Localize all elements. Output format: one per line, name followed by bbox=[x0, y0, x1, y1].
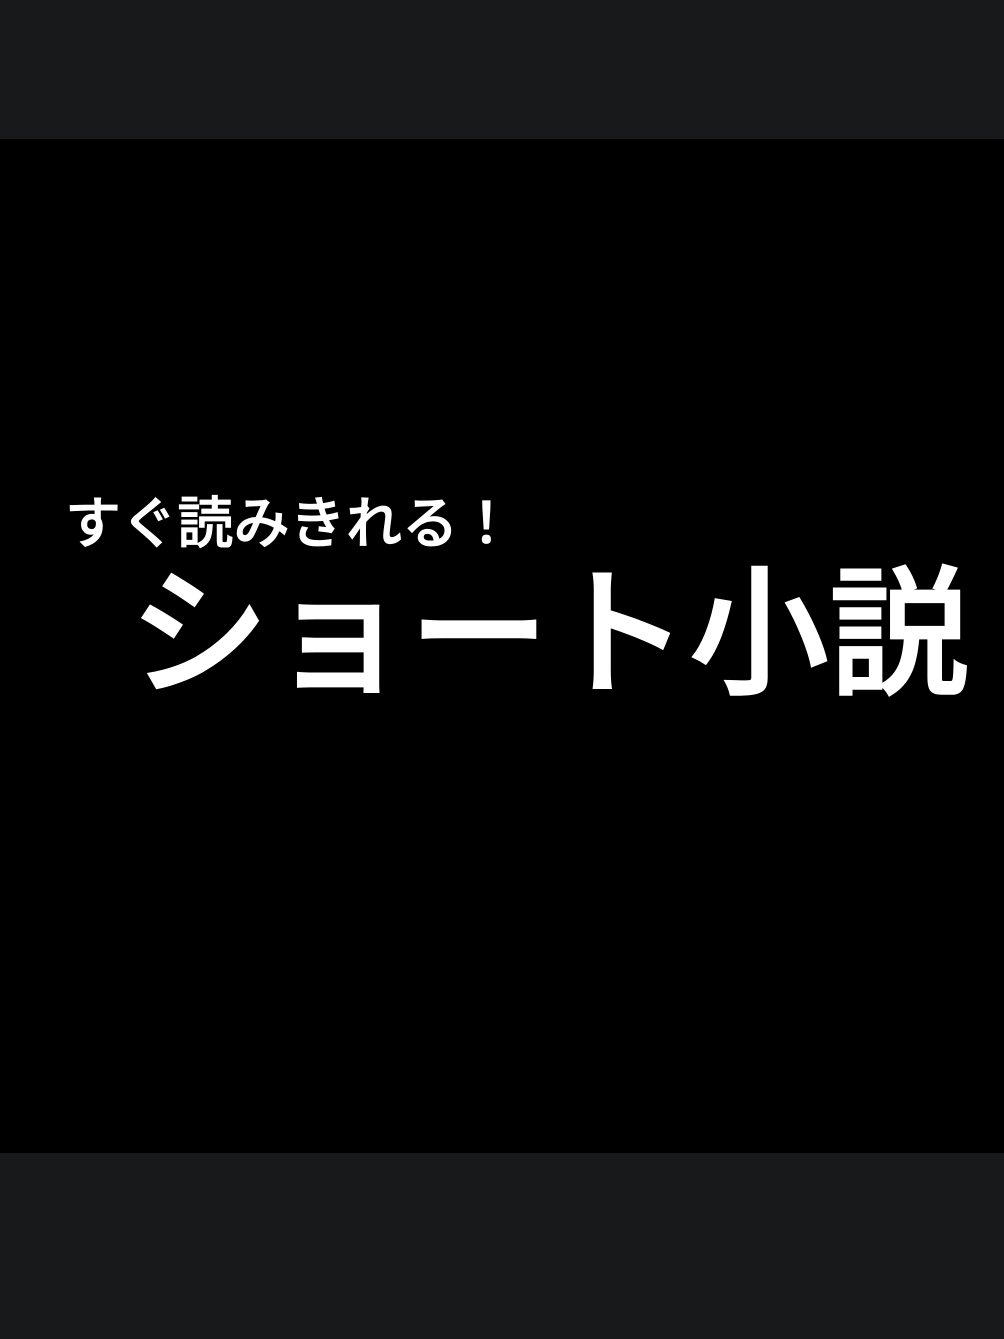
subtitle: すぐ読みきれる！ bbox=[65, 479, 515, 560]
title: ショート小説 bbox=[129, 522, 969, 724]
panel: black central area bbox=[0, 139, 1004, 1153]
